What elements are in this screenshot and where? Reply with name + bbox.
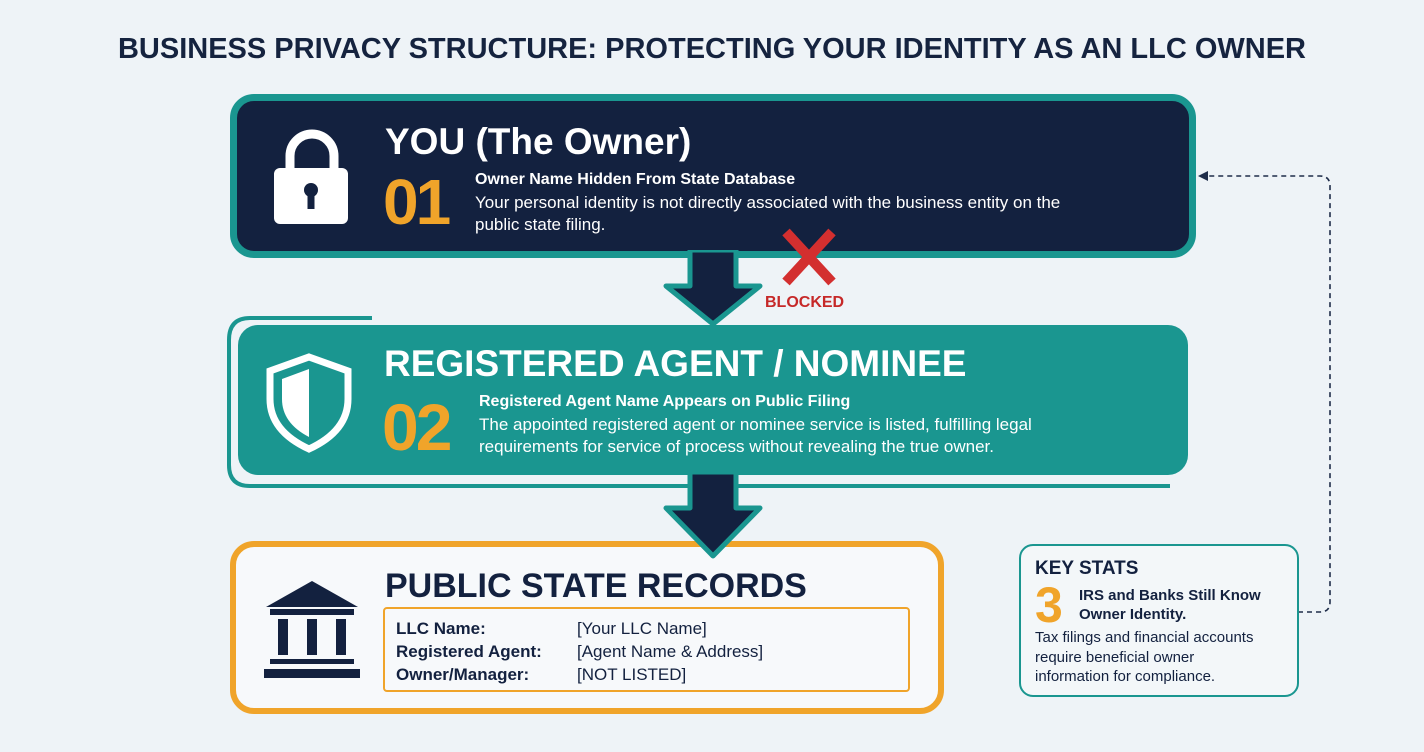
number 3: 3	[1035, 577, 1063, 633]
icon: shield	[266, 353, 352, 453]
panel: key stats	[1019, 544, 1299, 697]
record table: Owner/Manager:	[396, 665, 529, 684]
stat text	[1079, 587, 1261, 623]
panel: owner	[230, 94, 1196, 258]
arrow 1	[664, 250, 762, 325]
text: Registered Agent Name Appears on Public Filing	[479, 393, 850, 410]
body	[1035, 629, 1253, 685]
record table: [NOT LISTED]	[577, 665, 686, 684]
icon: government building	[264, 581, 360, 678]
text	[479, 393, 1032, 456]
body: require beneficial owner	[1035, 648, 1194, 666]
icon: lock	[274, 130, 348, 224]
text: public state filing.	[475, 215, 605, 234]
stat text: IRS and Banks Still Know	[1079, 587, 1261, 604]
record table: LLC Name:	[396, 619, 486, 638]
title: BUSINESS PRIVACY STRUCTURE: PROTECTING YOUR IDENTITY AS AN LLC OWNER	[118, 33, 1306, 65]
box2 outer frame	[229, 318, 1170, 486]
heading: PUBLIC STATE RECORDS	[385, 567, 807, 605]
text: requirements for service of process without revealing the true owner.	[479, 437, 994, 456]
record table: [Your LLC Name]	[577, 619, 707, 638]
arrow 2	[664, 474, 762, 558]
text: Owner Name Hidden From State Database	[475, 171, 795, 188]
text: The appointed registered agent or nominee service is listed, fulfilling legal	[479, 415, 1032, 434]
icon: blocked X: BLOCKED	[765, 294, 844, 311]
heading: KEY STATS	[1035, 558, 1138, 579]
record table	[383, 607, 910, 692]
record table: Registered Agent:	[396, 642, 542, 661]
heading: REGISTERED AGENT / NOMINEE	[384, 343, 966, 384]
panel: public state records	[230, 541, 944, 714]
number 01: 01	[383, 166, 448, 238]
stat text: Owner Identity.	[1079, 606, 1186, 623]
body: information for compliance.	[1035, 668, 1215, 685]
heading: YOU (The Owner)	[385, 121, 691, 162]
text	[475, 171, 1060, 234]
body: Tax filings and financial accounts	[1035, 629, 1253, 646]
icon: blocked X	[765, 228, 844, 311]
text: Your personal identity is not directly associated with the business entity on the	[475, 193, 1060, 212]
record table: [Agent Name & Address]	[577, 642, 763, 661]
number 02: 02	[382, 390, 449, 464]
dashed feedback arrow	[1198, 171, 1330, 612]
panel: registered agent	[238, 325, 1188, 475]
